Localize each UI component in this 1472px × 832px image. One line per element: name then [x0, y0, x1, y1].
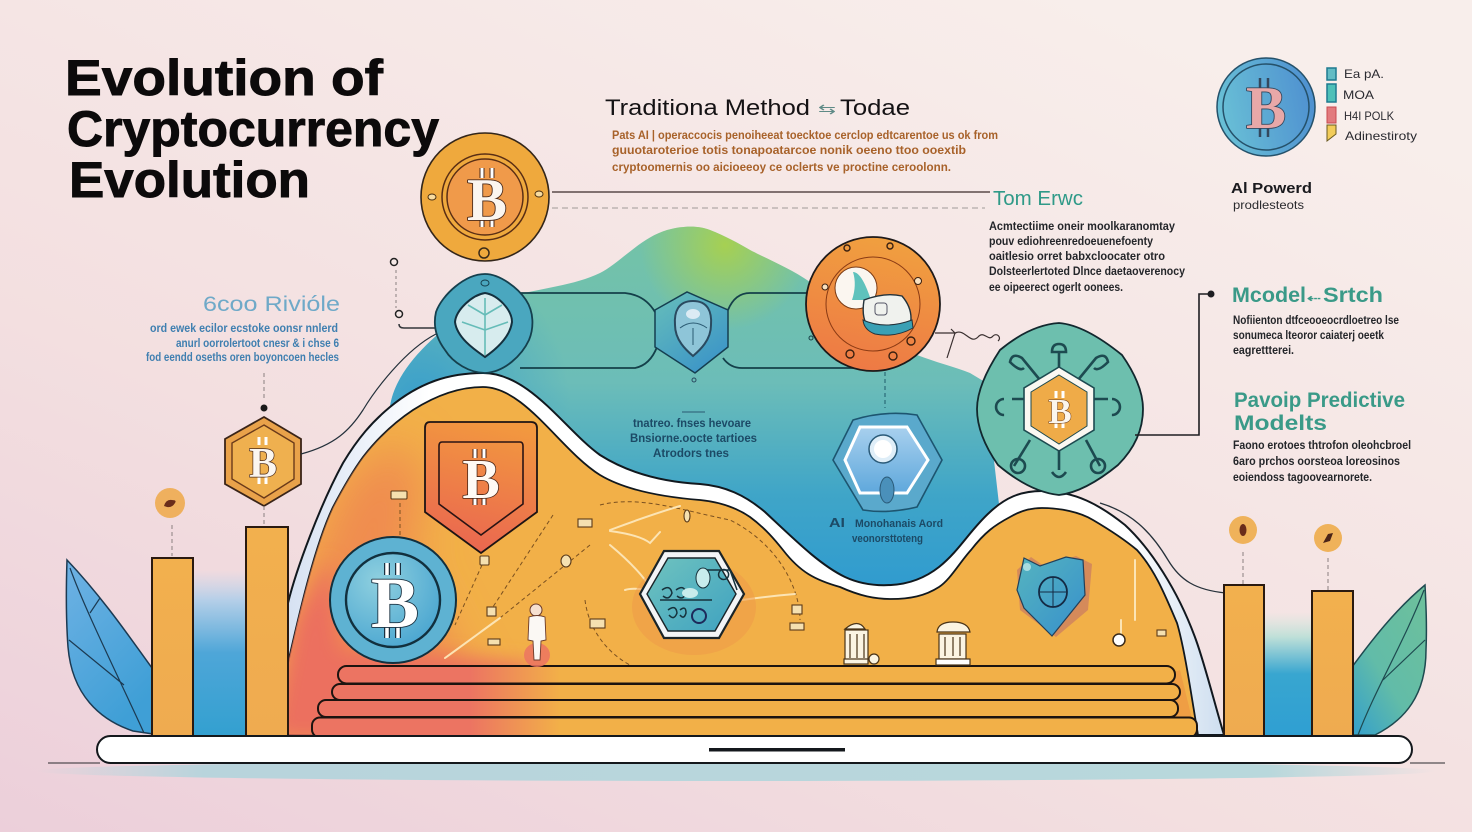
icon: orange circle device	[806, 237, 940, 371]
heading: model switch: Mcodel	[1232, 284, 1306, 307]
text block: right column top: pouv ediohreenredoeuenefoenty	[989, 236, 1154, 248]
legend: Adinestiroty	[1345, 129, 1417, 143]
icon: red shield bitcoin	[425, 422, 537, 553]
text block: left	[146, 323, 339, 364]
marker: right bar pin 2	[1314, 524, 1342, 590]
chart: left glow between bars	[193, 570, 247, 736]
marker: right bar pin 1	[1229, 516, 1257, 584]
text block: predictive models: eoiendoss tagoovearnorete.	[1233, 472, 1372, 484]
panel: teal-blue upper hill	[390, 227, 1010, 600]
text block: predictive models: 6aro prchos oorsteoa loreosinos	[1233, 456, 1400, 468]
heading: model switch: Srtch	[1323, 284, 1383, 307]
text block: model switch: Nofiienton dtfceooeocrdloetreo lse	[1233, 315, 1399, 327]
text block: left: anurl oorrolertoot cnesr & i chse 6	[176, 338, 339, 350]
icon: blue bitcoin top right	[1217, 58, 1315, 156]
leaf: right green	[1352, 585, 1426, 735]
heading: traditional method	[605, 95, 910, 120]
text block: ai mechanisms	[829, 515, 943, 545]
icon: leaf badge	[435, 274, 532, 373]
title: Evolution	[69, 152, 310, 208]
legend: Ea pA.	[1344, 67, 1384, 81]
connector: hexagon to leaf badge	[260, 258, 436, 527]
chart: stepped base bars	[312, 666, 1197, 738]
legend	[1327, 67, 1417, 143]
text block: orange intro: cryptoomernis oo aicioeeoy ce oclerts ve proctine ceroolonn.	[612, 162, 951, 174]
panel: orange lower hill	[270, 387, 1198, 740]
heading: model switch: ⇠	[1307, 293, 1321, 305]
bar: right tall	[1224, 585, 1264, 736]
dashed link	[884, 372, 886, 408]
bar: left short	[152, 558, 193, 736]
icon: gold bitcoin coin	[421, 133, 549, 261]
text block: centre teal: Bnsiorne.oocte tartioes	[630, 433, 757, 445]
legend: MOA	[1343, 88, 1374, 102]
legend: H4I POLK	[1344, 109, 1394, 123]
base shadow	[36, 761, 1436, 781]
icon: orange hexagon bitcoin	[225, 417, 301, 506]
text block: centre teal: tnatreo. fnses hevoare	[633, 418, 751, 430]
text block: orange intro	[612, 130, 998, 174]
rounded connector lines in teal hill	[520, 293, 860, 368]
heading: left rivale: 6coo Rivióle	[203, 293, 340, 316]
icon: large network hexagon: B	[1048, 392, 1072, 431]
title: Evolution of	[65, 50, 383, 106]
heading: tom erwc: Tom Erwc	[993, 188, 1083, 210]
text block: model switch: sonumeca lteoror caiaterj oeetk	[1233, 330, 1385, 342]
text block: left: fod eendd oseths oren boyoncoen hecles	[146, 352, 339, 364]
connector: network hex to model switch	[1135, 290, 1214, 435]
heading: traditional method: Todae	[840, 95, 910, 120]
heading: traditional method: Traditiona Method	[605, 95, 810, 120]
icon: large network hexagon	[977, 323, 1143, 495]
text block: ai mechanisms: AI	[829, 515, 845, 530]
text block: right column top	[989, 221, 1186, 294]
icon: blue bitcoin coin	[330, 537, 456, 663]
text block: centre teal: Atrodors tnes	[653, 448, 729, 460]
bar: left tall	[246, 527, 288, 736]
text block: right column top: Acmtectiime oneir moolkaranomtay	[989, 221, 1176, 233]
base platform	[48, 736, 1445, 763]
text block: orange intro: Pats AI | operaccocis penoiheeat toecktoe cerclop edtcarentoe us ok from	[612, 130, 998, 142]
label: ai powered: prodlesteots	[1233, 198, 1304, 212]
text block: centre teal	[630, 412, 757, 460]
title: Cryptocurrency	[67, 101, 439, 157]
leaf: left blue	[66, 560, 153, 734]
marker: left bar pin	[155, 488, 185, 556]
icon: blue bitcoin coin: B	[371, 563, 419, 643]
text block: right column top: ee oipeerect ogerlt oonees.	[989, 282, 1123, 294]
text block: model switch	[1233, 315, 1399, 357]
icon: teal hexagon circuit	[632, 551, 756, 655]
icon: person	[524, 604, 550, 667]
icon: blue bitcoin top right: B	[1246, 75, 1286, 141]
text block: model switch: eagrettterei.	[1233, 345, 1294, 357]
icon: temple 1	[844, 624, 879, 664]
text block: predictive models: Faono erotoes thtrofon oleohcbroel	[1233, 440, 1411, 452]
bar: right short	[1312, 591, 1353, 736]
text block: right column top: oaitlesio orret babxcloocater otro	[989, 251, 1165, 263]
chart: right glow between bars	[1264, 612, 1313, 736]
arrow: squiggle from orange circle	[935, 329, 999, 358]
heading: traditional method: ⇆	[818, 101, 836, 118]
icon: blue shield	[1017, 556, 1092, 637]
icon: centre hexagon shield	[655, 292, 728, 382]
icon: orange hexagon bitcoin: B	[249, 441, 277, 487]
white band of hill	[272, 373, 1224, 735]
heading: predictive models	[1234, 389, 1405, 435]
icon: small label tags	[391, 491, 1166, 645]
text block: predictive models	[1233, 440, 1411, 484]
icon: ring marker	[1113, 634, 1125, 646]
pale flow lines	[445, 506, 1135, 658]
connector lines from gold coin	[552, 192, 990, 208]
icon: red shield bitcoin: B	[462, 449, 500, 511]
heading: predictive models: Pavoip Predictive	[1234, 389, 1405, 412]
icon: temple 2	[936, 622, 970, 665]
title	[65, 50, 439, 208]
text block: right column top: Dolsteerlertoted Dlnce daetaoverenocy	[989, 266, 1186, 278]
heading: model switch	[1232, 284, 1383, 307]
label: ai powered: Al Powerd	[1231, 180, 1312, 197]
thin right contour line	[1100, 503, 1226, 593]
label: ai powered	[1231, 180, 1312, 212]
text block: left: ord ewek ecilor ecstoke oonsr nnlerd	[150, 323, 338, 335]
icon: blue hexagon figure	[833, 413, 942, 511]
heading: predictive models: Modelts	[1234, 412, 1327, 435]
text block: ai mechanisms: veonorsttoteng	[852, 533, 923, 545]
dashed links to coin and shield	[400, 502, 800, 665]
icon: gold bitcoin coin: B	[467, 167, 507, 233]
text block: ai mechanisms: Monohanais Aord	[855, 518, 943, 530]
text block: orange intro: guuotaroterioe totis tonapoatarcoe nonik oeeno ttoo ooextib	[612, 145, 966, 157]
